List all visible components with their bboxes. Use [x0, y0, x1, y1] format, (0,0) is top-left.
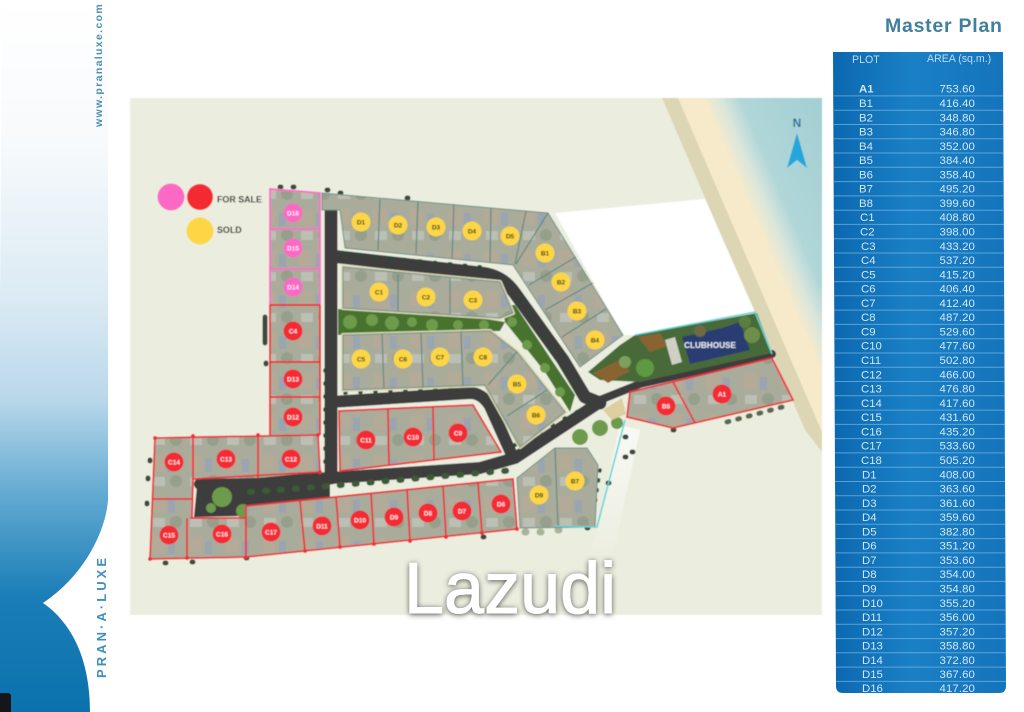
sold plots: C1-C3 — [343, 267, 513, 318]
table rows: 358.40 — [940, 169, 975, 181]
north arrow: N — [793, 116, 801, 130]
table rows: B2 — [859, 112, 873, 124]
table rows: 357.20 — [940, 626, 975, 638]
table rows: B4 — [859, 141, 873, 153]
table rows: 353.60 — [940, 555, 975, 567]
plots outlined pink: D16, D15, D14 — [270, 189, 320, 305]
table rows: C4 — [861, 255, 876, 267]
table rows: D4 — [862, 512, 877, 524]
plot markers for sale red: D13 — [287, 376, 299, 384]
plot markers sold yellow — [352, 212, 604, 504]
table rows: 382.80 — [940, 526, 975, 538]
plot markers for sale red: A1 — [718, 392, 727, 398]
plot markers for sale red: C9 — [454, 430, 463, 438]
table rows: C7 — [861, 298, 876, 310]
plot markers sold yellow: D4 — [468, 228, 477, 236]
area table — [833, 52, 1006, 695]
table rows: 487.20 — [940, 312, 975, 324]
legend: FOR SALE — [217, 194, 262, 204]
plots outlined red: C12, C13, C14, C15, C16 — [148, 433, 322, 561]
table rows: 537.20 — [940, 255, 975, 267]
table rows: D8 — [862, 569, 877, 581]
watermark: Lazudi — [404, 549, 616, 629]
plot markers sold yellow: B4 — [591, 338, 600, 344]
plot markers sold yellow: D1 — [357, 220, 366, 226]
table rows: C17 — [861, 441, 882, 453]
table rows: 416.40 — [940, 98, 975, 110]
plot markers for sale red: C10 — [407, 434, 419, 442]
table rows: 399.60 — [940, 198, 975, 210]
table rows: 476.80 — [940, 384, 975, 396]
plot markers sold yellow: B6 — [532, 412, 541, 420]
title: Master Plan — [885, 15, 1003, 37]
plot markers for sale red: B8 — [662, 404, 671, 410]
table rows: C5 — [861, 269, 876, 281]
plot markers sold yellow: D2 — [394, 222, 403, 230]
plot markers sold yellow: C3 — [469, 298, 478, 304]
table rows: 431.60 — [940, 412, 975, 424]
table rows: 354.80 — [940, 584, 975, 596]
plot markers sold yellow: B7 — [571, 478, 580, 486]
table rows: C11 — [861, 355, 881, 367]
clubhouse label: CLUBHOUSE — [684, 341, 736, 350]
table rows: C13 — [861, 384, 882, 396]
table rows: B5 — [859, 155, 873, 167]
table rows: C16 — [861, 426, 882, 438]
table rows: D13 — [862, 641, 883, 653]
table rows: D11 — [862, 612, 882, 624]
plots outlined red: C11, C10, C9 — [339, 405, 501, 471]
table rows: 505.20 — [940, 455, 975, 467]
plot markers sold yellow: D3 — [432, 224, 441, 232]
table rows: C6 — [861, 284, 876, 296]
plots outlined red: C4, D13, D12 — [270, 305, 320, 435]
table rows: D12 — [862, 626, 883, 638]
table rows — [859, 84, 975, 695]
table rows: 354.00 — [940, 569, 975, 581]
table rows: C14 — [861, 398, 882, 410]
plot markers sold yellow: B1 — [541, 250, 550, 258]
plot markers for sale red: D12 — [287, 414, 299, 422]
table rows: D5 — [862, 526, 877, 538]
table rows: 433.20 — [940, 241, 975, 253]
plot markers for sale red: D11 — [316, 524, 328, 530]
plots outlined red: B8 and A1 — [627, 358, 793, 428]
table rows: B1 — [859, 98, 873, 110]
table rows: 753.60 — [940, 84, 975, 96]
plots outlined red: C17, D11-D6 — [246, 479, 519, 557]
table rows: 351.20 — [940, 541, 975, 553]
plot markers for sale red: C14 — [168, 460, 180, 466]
table rows: D1 — [862, 469, 877, 481]
table rows: 529.60 — [940, 326, 975, 338]
table rows: 384.40 — [940, 155, 975, 167]
table rows: C18 — [861, 455, 882, 467]
plot markers for sale red: C13 — [220, 456, 232, 464]
plot markers sold yellow: C8 — [479, 354, 488, 362]
plot markers sold yellow: C6 — [399, 356, 408, 364]
table rows: 466.00 — [940, 369, 975, 381]
undeveloped white plot — [555, 199, 755, 335]
plot markers sold yellow: C1 — [375, 290, 384, 296]
table rows: D16 — [862, 683, 883, 695]
table rows: C9 — [861, 326, 876, 338]
plot markers for sale red: C15 — [163, 532, 175, 540]
table header: AREA (sq.m.) — [927, 53, 991, 65]
table rows: 361.60 — [940, 498, 975, 510]
table rows: 367.60 — [940, 669, 975, 681]
table rows: D14 — [862, 655, 883, 667]
table rows: B3 — [859, 126, 873, 138]
table rows: 356.00 — [940, 612, 975, 624]
table rows: D9 — [862, 584, 877, 596]
table rows: B7 — [859, 184, 873, 196]
plot markers for sale red: D7 — [458, 508, 467, 516]
table rows: C3 — [861, 241, 876, 253]
plot markers sold yellow: D5 — [506, 234, 515, 240]
legend: SOLD — [217, 225, 242, 235]
table rows: 495.20 — [940, 184, 975, 196]
table rows: 435.20 — [940, 426, 975, 438]
pale streak by south boundary — [590, 425, 640, 560]
table rows: 502.80 — [940, 355, 975, 367]
plot markers for sale red: C16 — [216, 532, 228, 538]
plot markers for sale red: C4 — [289, 328, 298, 336]
plot markers for sale pink: D16 — [287, 210, 299, 218]
table rows: 398.00 — [940, 226, 975, 238]
plot markers for sale red: D8 — [424, 510, 433, 518]
palms and hedges — [147, 187, 786, 563]
table rows: 415.20 — [940, 269, 975, 281]
table rows: D3 — [862, 498, 877, 510]
plot markers for sale red: D10 — [354, 518, 366, 524]
plot markers sold yellow: B3 — [573, 308, 582, 316]
table rows: C10 — [861, 341, 882, 353]
sold plots: D9 and B7 — [517, 420, 625, 528]
sea and beach — [662, 98, 822, 452]
table header: PLOT — [852, 54, 880, 66]
blue wave panel — [0, 0, 108, 712]
brand name: PRAN·A·LUXE — [94, 555, 109, 678]
table rows: 417.20 — [940, 683, 975, 695]
table rows: D2 — [862, 484, 877, 496]
table rows: D7 — [862, 555, 877, 567]
table rows: 406.40 — [940, 284, 975, 296]
table rows: 417.60 — [940, 398, 975, 410]
site plan map — [130, 98, 822, 615]
plot markers for sale pink: D15 — [287, 246, 299, 252]
table rows: 359.60 — [940, 512, 975, 524]
table rows: 358.80 — [940, 641, 975, 653]
table rows: 346.80 — [940, 126, 975, 138]
plot markers sold yellow: D9 — [535, 492, 544, 500]
table rows: 352.00 — [940, 141, 975, 153]
table rows: D6 — [862, 541, 877, 553]
table rows: D15 — [862, 669, 883, 681]
plot markers for sale red: D6 — [497, 502, 506, 508]
plot markers sold yellow: C2 — [422, 294, 431, 302]
table background — [833, 52, 1006, 693]
table rows: 533.60 — [940, 441, 975, 453]
clubhouse — [588, 312, 772, 383]
table rows: 372.80 — [940, 655, 975, 667]
table rows: C2 — [860, 226, 875, 238]
plot markers sold yellow: B2 — [557, 280, 566, 286]
road verges — [343, 267, 565, 447]
plot markers for sale red: C17 — [265, 530, 277, 536]
plot markers for sale pink: D14 — [287, 284, 299, 292]
table rows: C15 — [861, 412, 882, 424]
website address: www.pranaluxe.com — [93, 3, 105, 128]
plot markers for sale red — [160, 322, 732, 544]
table rows: 477.60 — [940, 341, 975, 353]
table header — [852, 53, 991, 66]
plot markers for sale pink — [284, 204, 302, 296]
sold plots: D1-D5 and B1-B4 — [322, 193, 623, 367]
sold plots: C5-C8, B5, B6 — [343, 331, 565, 447]
plot markers for sale red: C11 — [360, 438, 372, 444]
left brand strip — [0, 0, 109, 712]
table rows: D10 — [862, 598, 883, 610]
table rows: C8 — [861, 312, 876, 324]
table rows: C1 — [860, 212, 875, 224]
plot markers sold yellow: C5 — [357, 356, 366, 364]
table rows: A1 — [859, 84, 874, 96]
table rows: 355.20 — [940, 598, 975, 610]
table rows: 408.00 — [940, 469, 975, 481]
table rows: 412.40 — [940, 298, 975, 310]
legend — [158, 184, 262, 244]
table rows: 408.80 — [940, 212, 975, 224]
ground — [130, 98, 822, 615]
landscaping — [206, 305, 626, 518]
table rows: B8 — [859, 198, 873, 210]
table rows: 348.80 — [940, 112, 975, 124]
table rows: B6 — [859, 169, 873, 181]
plot markers sold yellow: B5 — [513, 382, 522, 388]
table rows: 363.60 — [940, 484, 975, 496]
table rows: C12 — [861, 369, 882, 381]
north arrow — [787, 116, 807, 168]
roads — [194, 212, 772, 517]
plot markers sold yellow: C7 — [436, 354, 445, 362]
plot markers for sale red: C12 — [285, 456, 297, 464]
plot markers for sale red: D9 — [390, 514, 399, 522]
corner tag — [0, 693, 11, 712]
